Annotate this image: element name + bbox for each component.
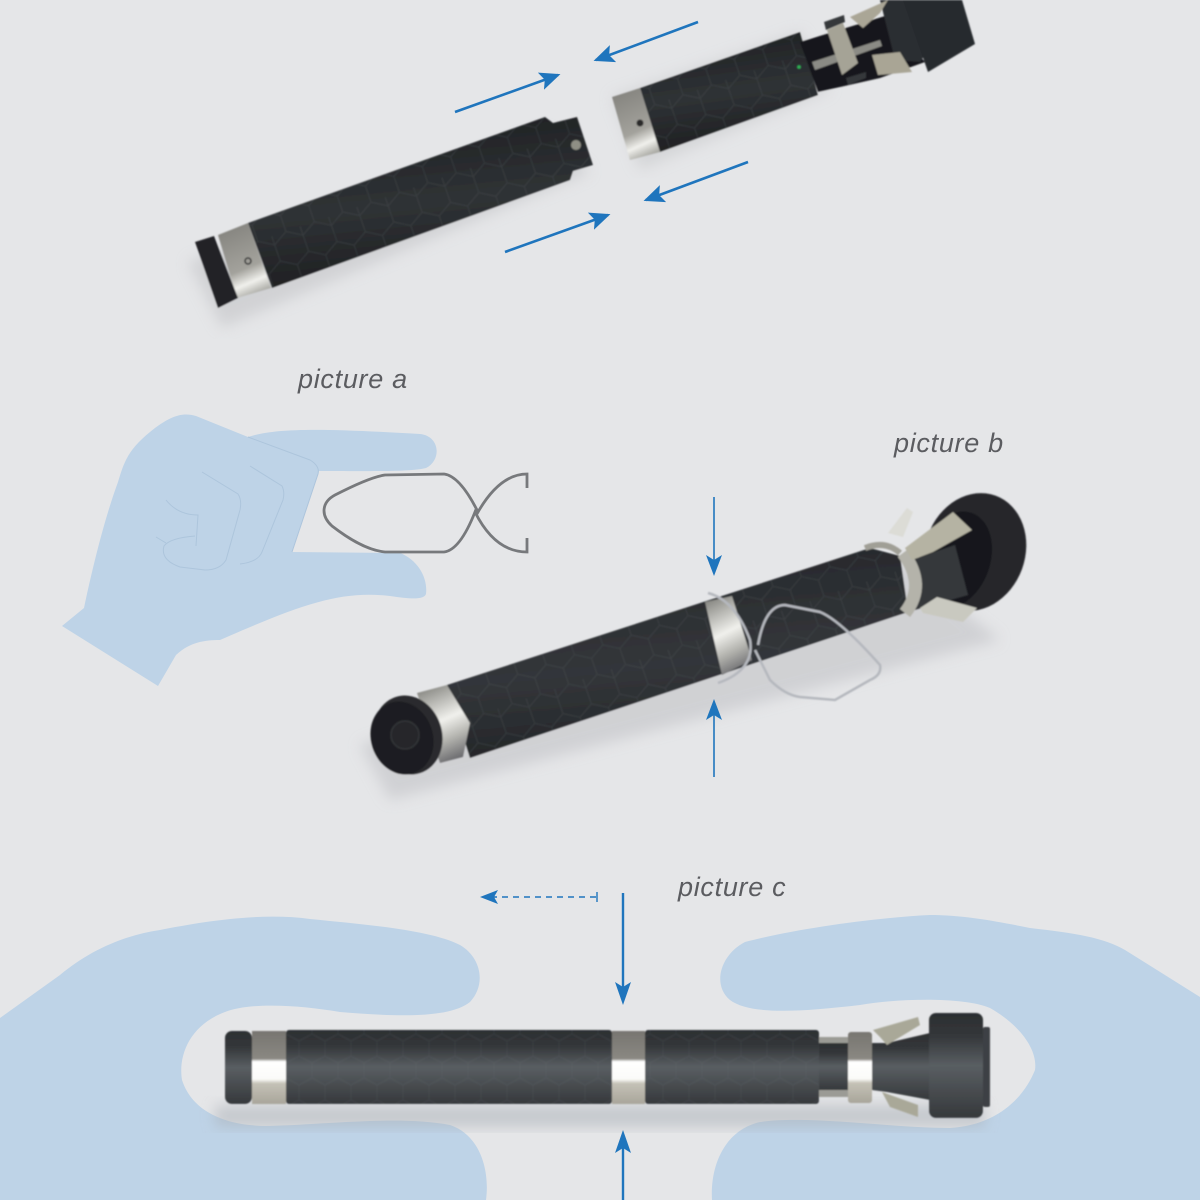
arrow: upper left — [455, 75, 558, 112]
arrow: upper right — [596, 22, 698, 60]
device: assembled handle with pull ring — [360, 479, 1043, 800]
hand pinching clip — [62, 415, 437, 686]
device: assembled handle, side view — [215, 1013, 990, 1127]
right hand holding device — [712, 915, 1200, 1200]
arrow: pinch from above — [706, 497, 722, 576]
label: picture c: picture c — [677, 872, 786, 902]
arrow: lower right — [646, 162, 748, 200]
left hand holding device — [0, 917, 487, 1200]
arrow: press from below — [615, 1130, 631, 1200]
arrow: press from above — [615, 893, 631, 1005]
wire pull ring held in hand — [324, 474, 527, 552]
arrow: dashed direction — [480, 890, 597, 904]
label: picture b: picture b — [893, 428, 1004, 458]
device: separated lower handle section — [188, 117, 593, 328]
arrow: pinch from below — [706, 699, 722, 777]
arrow: lower left — [505, 215, 608, 252]
device: separated upper handle section with head — [612, 0, 975, 170]
label: picture a: picture a — [297, 364, 408, 394]
